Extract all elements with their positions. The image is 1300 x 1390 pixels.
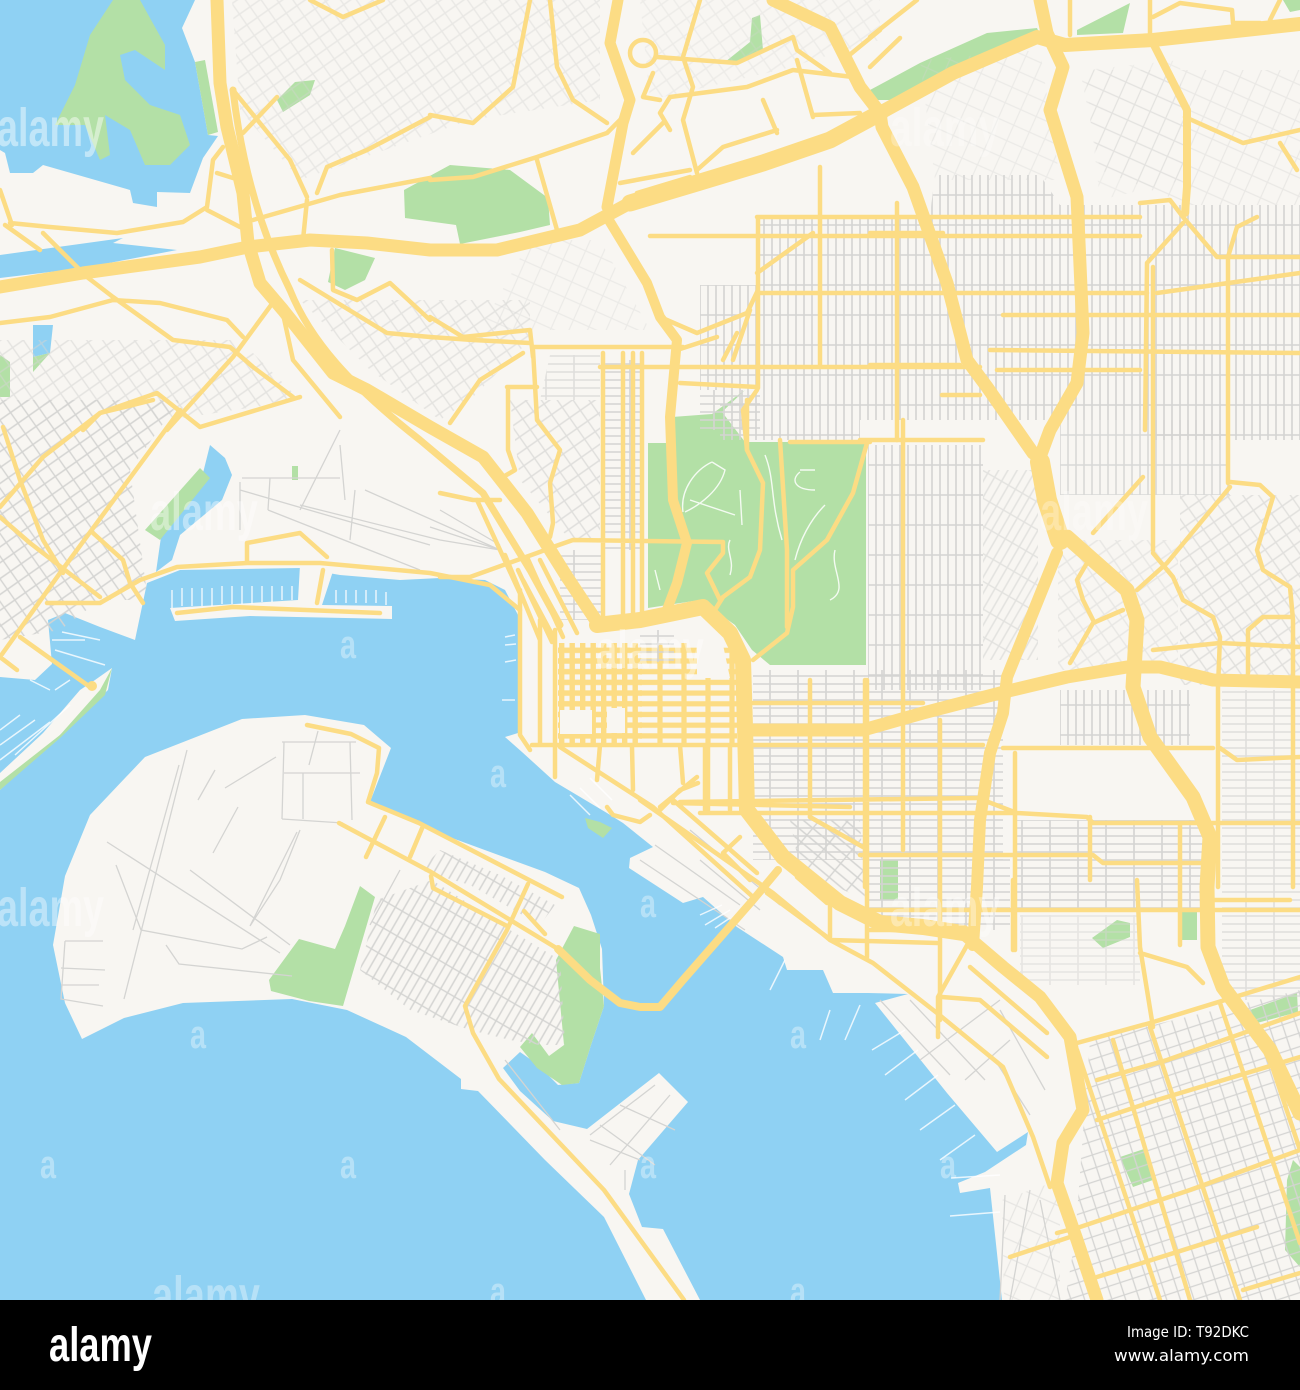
footer logo: alamy (49, 1319, 152, 1372)
freeway: SR-163 south (607, 217, 687, 615)
park: Coronado golf (269, 886, 375, 1006)
marina roundabout (87, 681, 97, 691)
arterials: National City (1010, 880, 1300, 1300)
Coronado Bridge (558, 870, 778, 1007)
arterials: Balboa Park (713, 400, 870, 660)
block: East Village park (697, 633, 730, 678)
freeway: I-805 north (1040, 0, 1083, 457)
freeway: central junction (1040, 462, 1060, 540)
streets: Golden Hill (753, 670, 1003, 860)
watermark: alamy wordmarks: alamy (1040, 482, 1148, 542)
land: harbor island (170, 565, 392, 621)
white park paths in Balboa Park (655, 455, 839, 600)
block: Horton Plaza (560, 710, 592, 734)
land: Coronado and Silver Strand (53, 715, 700, 1300)
streets: Coronado (360, 880, 565, 1045)
watermark: small a marks: a (640, 1143, 657, 1187)
park: Fiesta Island (55, 0, 190, 165)
arterials: Coronado (307, 725, 684, 1300)
watermark: small a marks: a (190, 1013, 207, 1057)
arterials: downtown edges (477, 500, 740, 810)
watermark: small a marks: a (490, 1270, 507, 1314)
arterials: North Park (533, 167, 1300, 450)
freeway: I-5 south (597, 607, 963, 933)
streets: Hillcrest (603, 360, 643, 550)
freeway: I-805 south (1067, 537, 1300, 1113)
freeway: SR-163 north (607, 0, 630, 207)
arterials: Pacific Beach to Midway (0, 147, 430, 430)
park: Mission Bay strip (195, 60, 218, 135)
freeway: I-8 west (0, 203, 630, 287)
arterials: Point Loma (0, 400, 520, 687)
footer bar (0, 1300, 1300, 1390)
freeway: I-8 to I-15 segment (880, 24, 1300, 113)
watermark: small a marks: a (940, 1143, 957, 1187)
park: Morley field corner (277, 80, 315, 112)
watermark: small a marks: a (340, 623, 357, 667)
freeway: SR-94 (745, 667, 1300, 730)
minor streets and airport lines (61, 430, 1060, 1300)
marina piers (0, 586, 1000, 1216)
park: Mission Valley golf (404, 165, 550, 244)
streets: National City (1065, 990, 1300, 1300)
arterials: Hillcrest and uptown (430, 317, 723, 620)
arterials: Logan and harbor drive (560, 747, 1050, 1187)
watermark: alamy wordmarks: alamy (150, 482, 258, 542)
park: Presidio (328, 248, 375, 290)
freeway: I-15 south (973, 553, 1057, 945)
streets: North Park (700, 175, 1300, 440)
watermark: alamy wordmarks (0, 98, 1148, 1326)
watermark: small a marks: a (790, 1013, 807, 1057)
watermark: alamy wordmarks: alamy (596, 620, 704, 680)
website: www.alamy.com (1114, 1346, 1249, 1365)
streets: City Heights (868, 445, 983, 690)
watermark: small a marks: a (490, 752, 507, 796)
park: San Diego River east (870, 28, 1040, 100)
freeway: I-5 north (217, 0, 597, 622)
water: San Diego Bay and Pacific Ocean (0, 568, 1028, 1300)
water: Sail Bay inlet (156, 445, 232, 572)
arterial: Mission Valley roundabout (630, 40, 656, 66)
watermark: small a marks (40, 623, 957, 1314)
land: Shelter Island marina strip (0, 668, 112, 790)
streets: Uptown hills (232, 0, 600, 180)
park: Balboa Park (648, 390, 866, 665)
water: small lagoon (33, 325, 53, 357)
park: Tidelands (520, 926, 604, 1085)
watermark: alamy wordmarks: alamy (890, 98, 1000, 158)
arterials: Mission Valley north (233, 0, 880, 240)
image ID: Image ID: T92DKC (1127, 1323, 1249, 1341)
downtown street grid (558, 630, 737, 747)
watermark: small a marks: a (640, 882, 657, 926)
arterials: upper east (870, 0, 1300, 550)
freeway: SR-15 branch (1153, 43, 1187, 213)
watermark: small a marks: a (790, 1270, 807, 1314)
freeway: Pacific Highway (233, 90, 560, 625)
park: small neighbourhood parks (880, 860, 898, 900)
streets: Sherman Heights diagonal (790, 820, 865, 900)
watermark: small a marks: a (40, 1143, 57, 1187)
streets: Point Loma (0, 400, 180, 640)
watermark: small a marks: a (340, 1143, 357, 1187)
watermark: alamy wordmarks: alamy (0, 878, 104, 938)
water: San Diego River channel (0, 238, 177, 278)
watermark: alamy wordmarks: alamy (152, 1266, 260, 1326)
watermark: alamy wordmarks: alamy (0, 98, 104, 158)
water: Mission Bay (0, 0, 218, 207)
freeway: I-8 east (630, 113, 880, 203)
arterials: Kensington to Chollas (1070, 477, 1300, 887)
freeway: upper I-15 (773, 0, 1033, 453)
arterials: Golden Hill (680, 420, 1300, 1020)
streets: Oak Park (1060, 420, 1230, 495)
streets: Chollas View (1060, 690, 1190, 745)
watermark: alamy wordmarks: alamy (890, 878, 1000, 938)
